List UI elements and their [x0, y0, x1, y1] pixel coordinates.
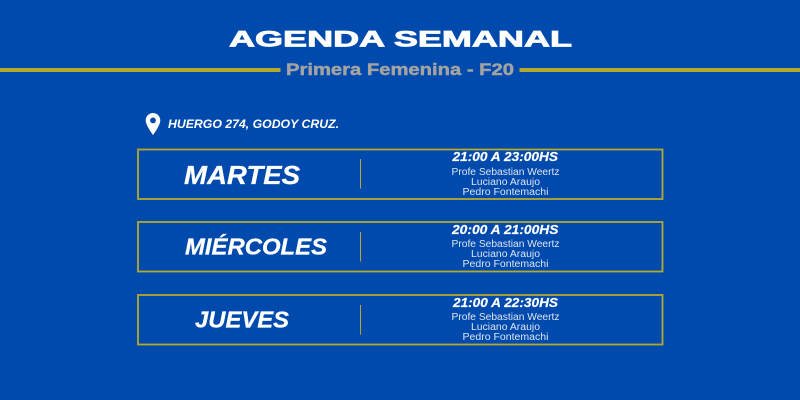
- title: AGENDA SEMANAL: [229, 26, 572, 52]
- day: MARTES: [184, 160, 301, 190]
- time: 21:00 A 22:30HS: [452, 295, 558, 310]
- panel: martes: [138, 149, 662, 199]
- day: MIÉRCOLES: [185, 232, 328, 260]
- staff: Luciano Araujo: [471, 249, 541, 260]
- staff: Luciano Araujo: [471, 177, 541, 188]
- staff: Luciano Araujo: [471, 322, 541, 333]
- icon: map pin: [146, 113, 160, 135]
- time: 20:00 A 21:00HS: [451, 222, 559, 237]
- panel: miercoles: [138, 222, 662, 272]
- staff: [452, 167, 560, 198]
- staff: Profe Sebastian Weertz: [452, 239, 560, 250]
- staff: Pedro Fontemachi: [462, 259, 548, 270]
- staff: Pedro Fontemachi: [462, 332, 548, 343]
- location: [146, 113, 339, 135]
- staff: Profe Sebastian Weertz: [452, 167, 560, 178]
- staff: Pedro Fontemachi: [462, 187, 548, 198]
- panel: jueves: [138, 295, 662, 344]
- subtitle with gold rules: Primera Femenina - F20: [286, 60, 514, 79]
- staff: Profe Sebastian Weertz: [452, 312, 560, 323]
- address: HUERGO 274, GODOY CRUZ.: [168, 119, 339, 131]
- staff: [452, 239, 560, 270]
- subtitle with gold rules: [0, 60, 800, 79]
- time: 21:00 A 23:00HS: [451, 149, 558, 164]
- staff: [452, 312, 560, 343]
- day: JUEVES: [195, 306, 290, 332]
